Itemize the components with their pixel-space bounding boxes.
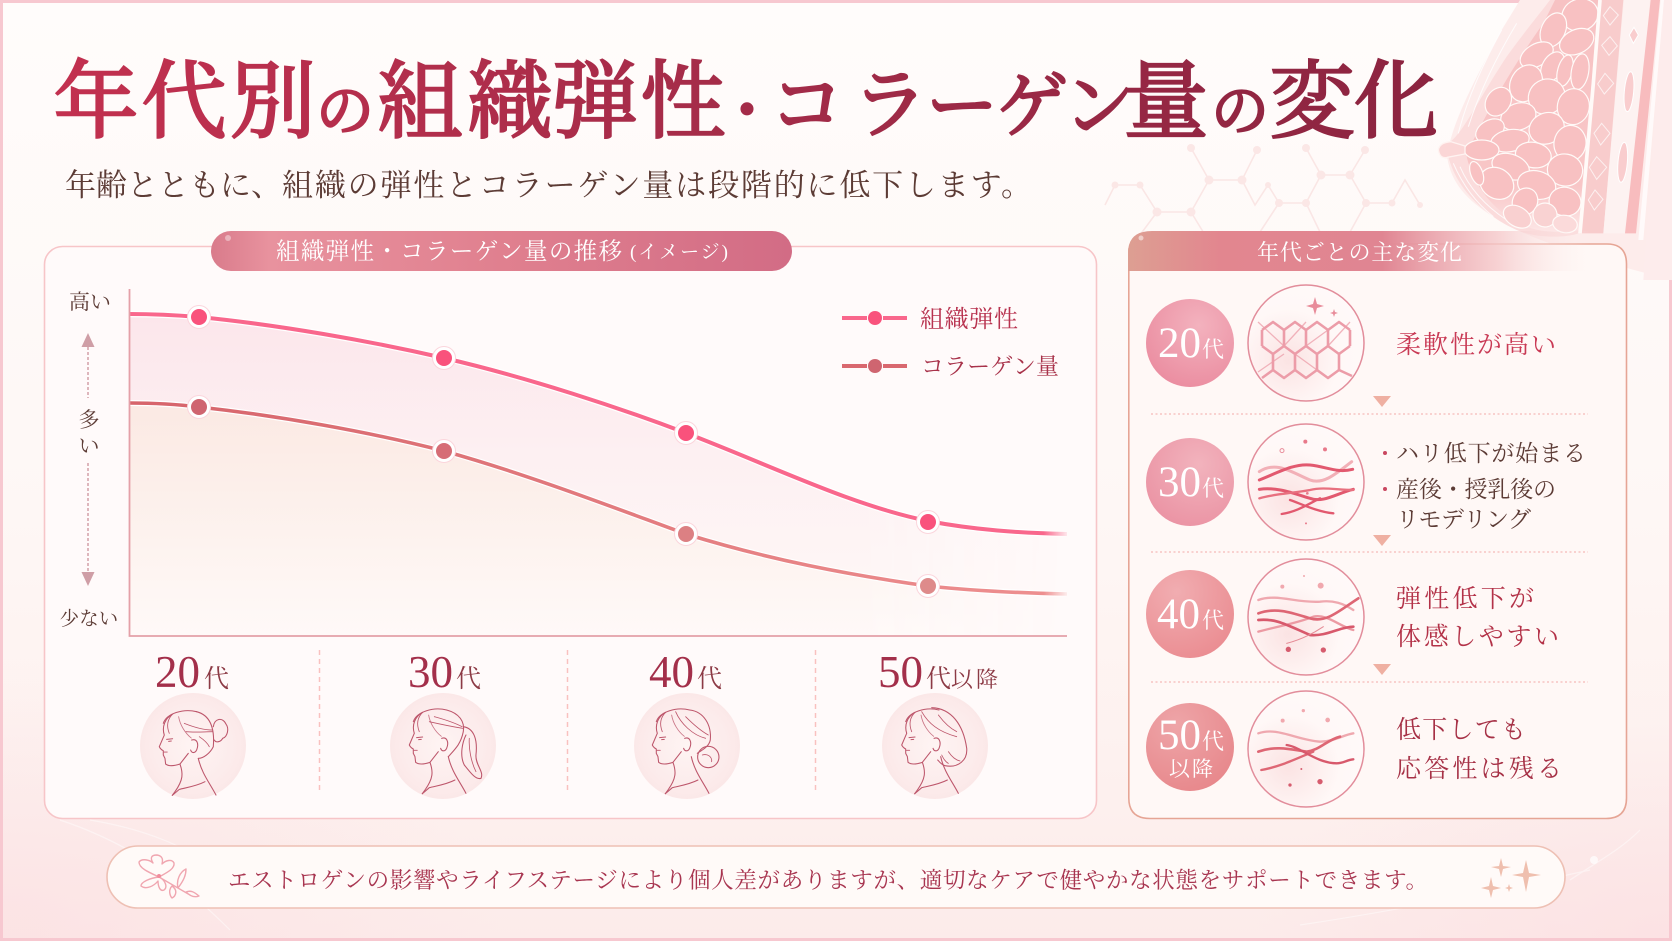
title: 年代別 bbox=[53, 56, 316, 150]
line chart bbox=[129, 289, 1067, 636]
title: コラ bbox=[769, 64, 928, 148]
age column dividers bbox=[320, 650, 816, 792]
age badge 20s: 20 bbox=[1158, 320, 1201, 367]
chart header pill: (イメージ) bbox=[630, 242, 728, 263]
footer note bbox=[107, 846, 1565, 908]
age badge 50s and older: 代 bbox=[1202, 729, 1224, 754]
row arrows bbox=[1373, 396, 1391, 675]
y axis labels: 高い bbox=[69, 290, 111, 314]
chart legend bbox=[842, 306, 1059, 379]
icon: woman profile with bun bbox=[159, 711, 228, 795]
age column: 30s: 代 bbox=[456, 665, 481, 693]
age badge 30s: 30 bbox=[1158, 459, 1201, 506]
title: 量 bbox=[1123, 56, 1209, 150]
text: 50s changes: 低下しても bbox=[1396, 716, 1526, 744]
icon: woman profile with low bun bbox=[652, 709, 719, 794]
row dividers bbox=[1151, 414, 1588, 682]
title bbox=[53, 56, 1439, 150]
title: 組織弾性 bbox=[377, 56, 726, 150]
text: 30s changes: 産後・授乳後の bbox=[1396, 477, 1556, 502]
molecular hexagon pattern bbox=[1105, 144, 1423, 235]
age column: 30s: 30 bbox=[408, 647, 453, 697]
icon: loosening collagen fibres bbox=[1248, 424, 1364, 540]
age badge 40s bbox=[1146, 570, 1234, 658]
panel: main changes by age bbox=[1128, 231, 1626, 818]
subtitle: 年齢とともに、 bbox=[65, 168, 282, 203]
text: 30s changes: ハリ低下が始まる bbox=[1396, 441, 1586, 466]
age column: 50s and older: 50 bbox=[878, 647, 923, 697]
title: の bbox=[316, 79, 374, 144]
subtitle: 組織の弾性とコラーゲン量は段階的に低下します。 bbox=[282, 168, 1032, 203]
chart header pill: 組織弾性・コラーゲン量の推移 bbox=[276, 238, 622, 265]
age column: 40s bbox=[634, 647, 740, 799]
footer note: エストロゲンの影響やライフステージにより個人差がありますが、適切なケアで健やかな状態をサポートできます。 bbox=[228, 868, 1428, 893]
age column: 40s: 代 bbox=[697, 665, 722, 693]
age column: 20s bbox=[140, 647, 246, 799]
age column: 50s and older bbox=[878, 647, 998, 799]
icon: weakened collagen fibres bbox=[1248, 559, 1364, 675]
age badge 40s: 代 bbox=[1202, 608, 1224, 633]
y axis labels: い bbox=[78, 434, 100, 458]
icon: sparkles bbox=[1481, 858, 1541, 898]
text: 40s changes: 弾性低下が bbox=[1396, 585, 1534, 613]
title: ・ bbox=[718, 79, 776, 144]
text: 40s changes bbox=[1396, 585, 1559, 651]
illustration: breast tissue cross-section bbox=[1438, 0, 1672, 280]
row: 50s and older bbox=[1146, 691, 1562, 807]
age badge 30s bbox=[1146, 438, 1234, 526]
age badge 30s: 代 bbox=[1202, 476, 1224, 501]
icon: woman profile with ponytail bbox=[409, 709, 482, 794]
age badge 50s and older: 以降 bbox=[1169, 757, 1213, 781]
icon: woman profile with bob bbox=[902, 708, 967, 794]
panel header: 年代ごとの主な変化 bbox=[1257, 240, 1462, 265]
chart legend: 組織弾性 bbox=[920, 306, 1018, 333]
chart legend: コラーゲン量 bbox=[921, 354, 1059, 379]
panel header bbox=[1128, 231, 1590, 271]
age column: 40s: 40 bbox=[649, 647, 694, 697]
age column: 20s: 20 bbox=[155, 647, 200, 697]
y axis labels: 少ない bbox=[60, 608, 118, 630]
text: 30s changes bbox=[1383, 441, 1586, 532]
row: 30s bbox=[1146, 424, 1586, 540]
title: の bbox=[1211, 79, 1269, 144]
age badge 20s: 代 bbox=[1202, 337, 1224, 362]
age column: 50s and older: 以降 bbox=[951, 667, 998, 692]
row: 40s bbox=[1146, 559, 1559, 675]
text: 30s changes: リモデリング bbox=[1396, 507, 1531, 532]
y axis labels: 多 bbox=[78, 408, 100, 432]
age column: 50s and older: 代 bbox=[926, 665, 951, 693]
y axis labels bbox=[60, 290, 118, 630]
title: ーゲン bbox=[926, 67, 1135, 147]
chart header pill bbox=[211, 231, 792, 271]
age badge 40s: 40 bbox=[1157, 591, 1200, 638]
icon: flower bbox=[139, 855, 199, 898]
text: 40s changes: 体感しやすい bbox=[1396, 623, 1559, 651]
age badge 50s and older bbox=[1146, 703, 1234, 791]
icon: dense collagen lattice bbox=[1248, 285, 1364, 401]
age badge 20s bbox=[1146, 299, 1234, 387]
age column: 20s: 代 bbox=[204, 665, 229, 693]
icon: sparse collagen fibres bbox=[1248, 691, 1364, 807]
text: 50s changes: 応答性は残る bbox=[1396, 755, 1562, 783]
panel: tissue elasticity and collagen chart bbox=[44, 231, 1096, 818]
age column: 30s bbox=[390, 647, 496, 799]
row: 20s bbox=[1146, 285, 1556, 401]
title: 変化 bbox=[1269, 56, 1439, 150]
text: 50s changes bbox=[1396, 716, 1562, 783]
age badge 50s and older: 50 bbox=[1158, 712, 1201, 759]
row: 20s: 柔軟性が高い bbox=[1396, 331, 1556, 359]
